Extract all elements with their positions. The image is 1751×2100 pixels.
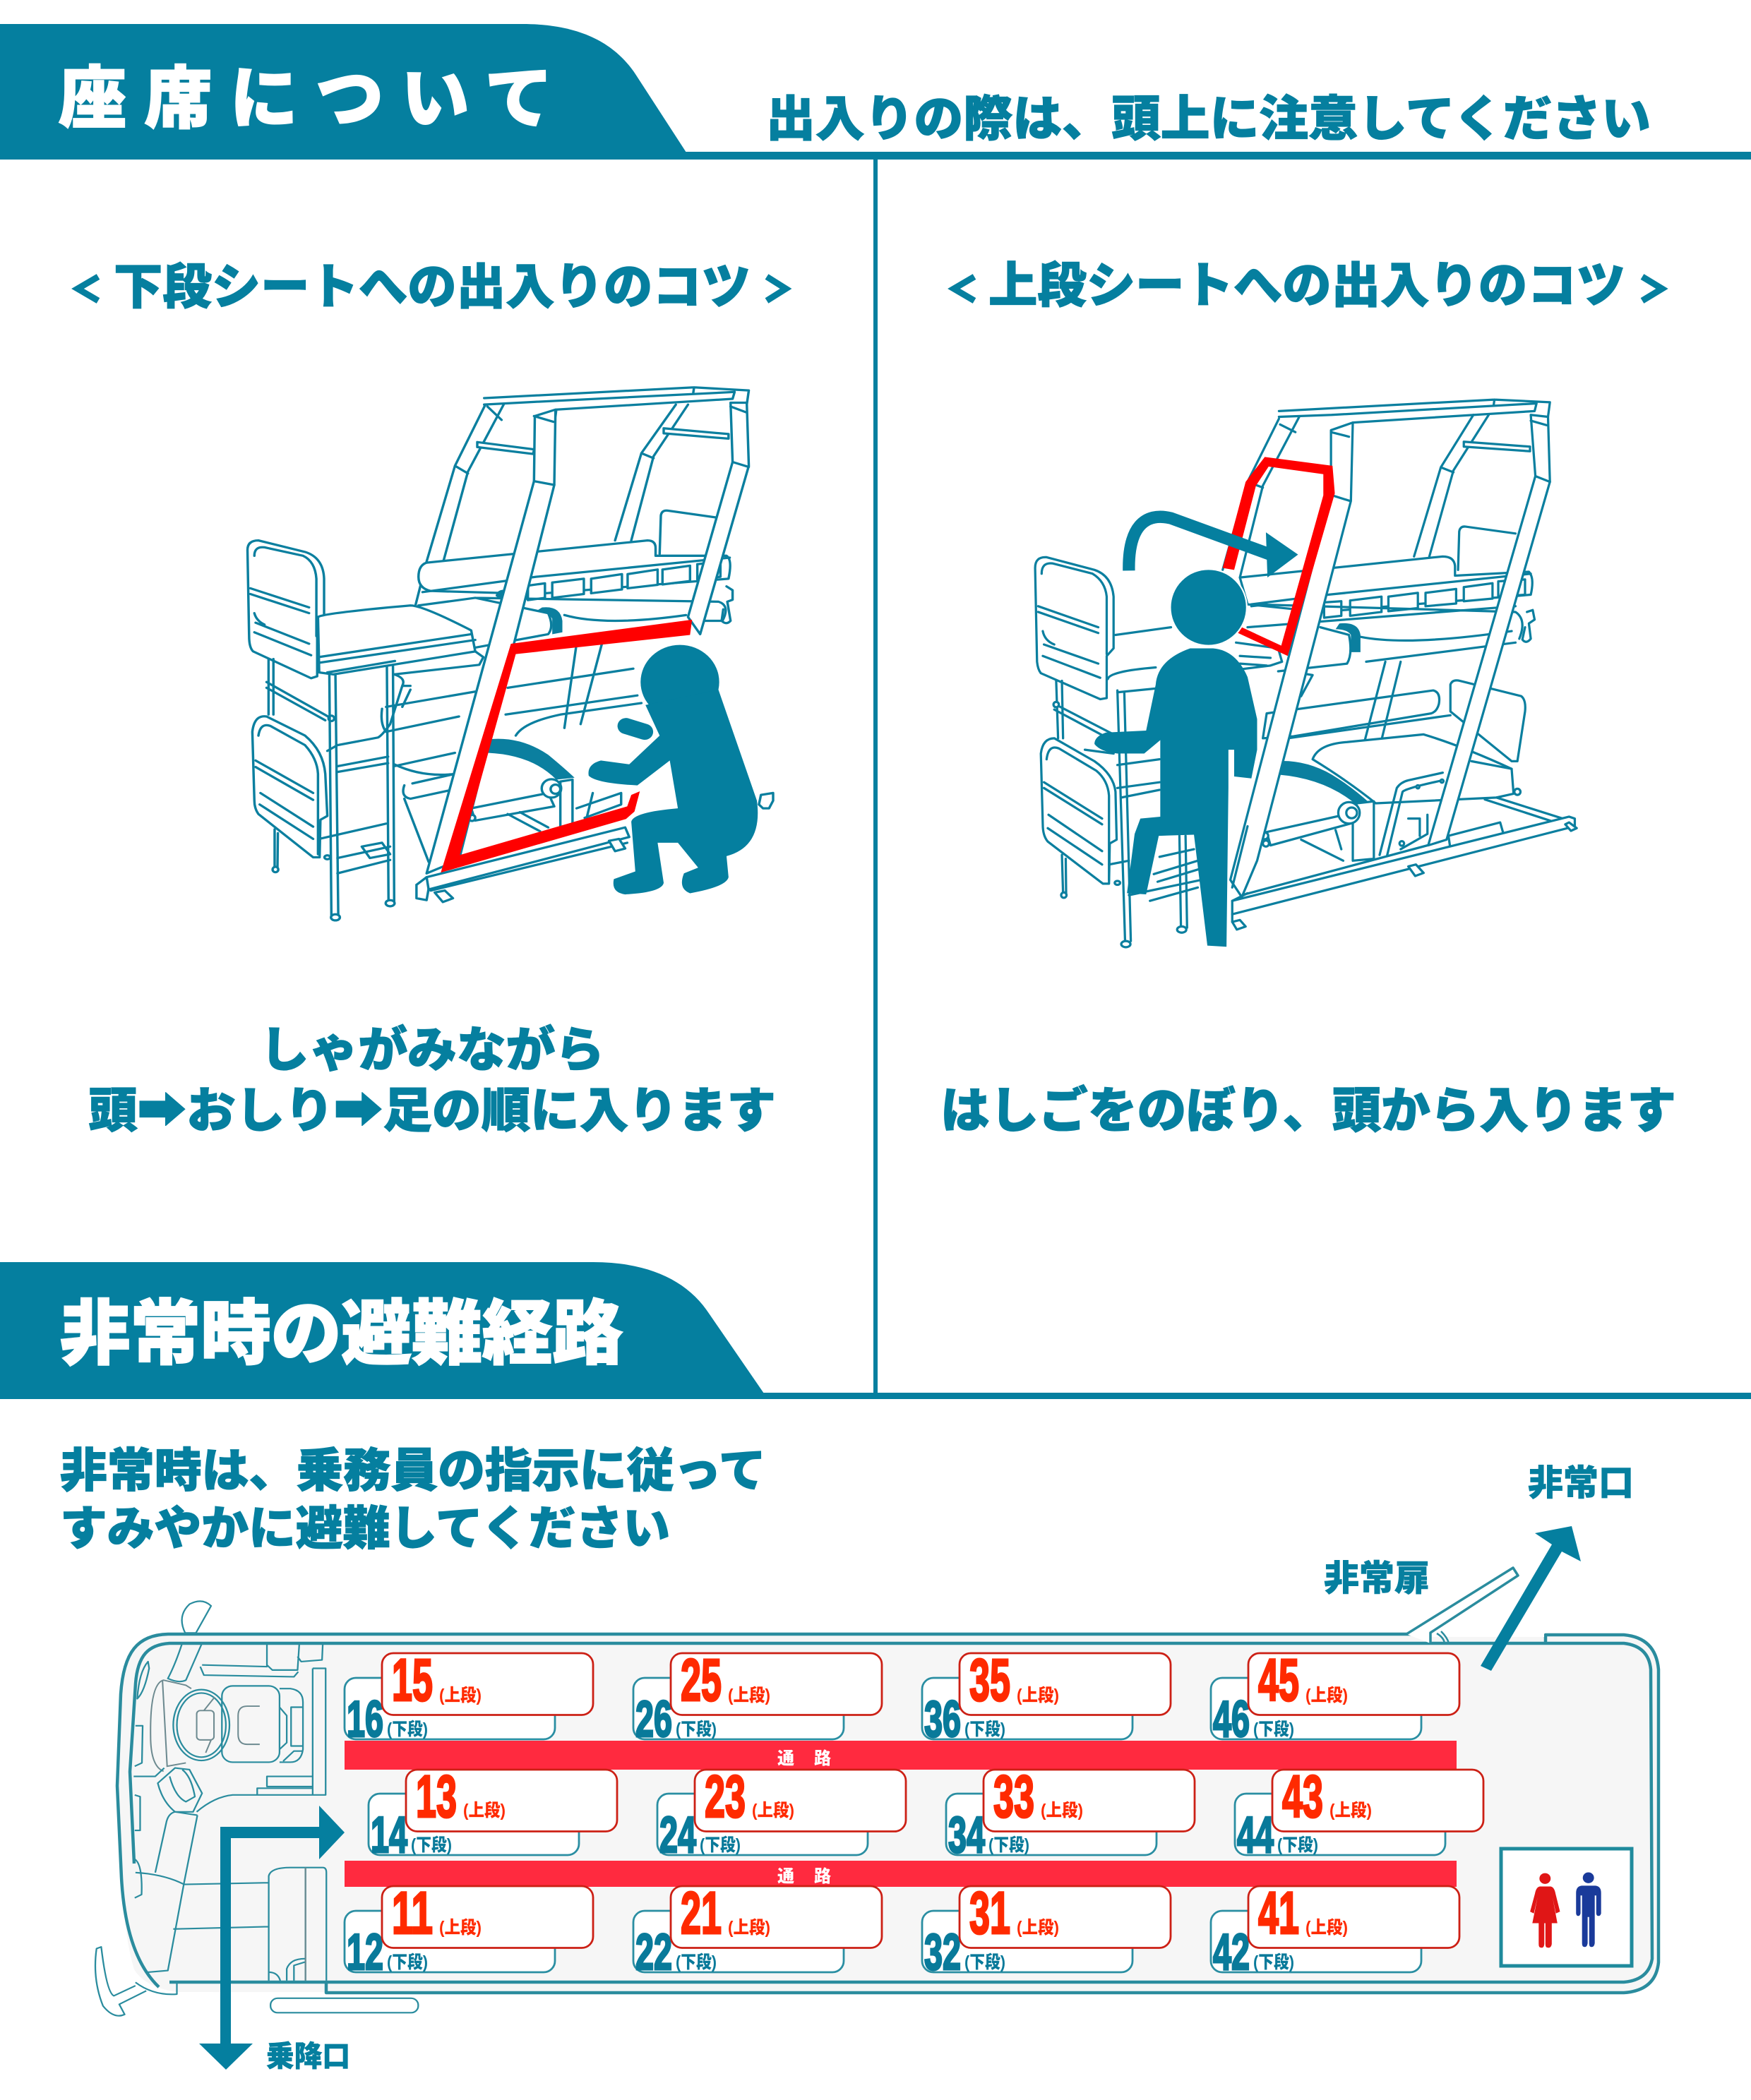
seats 42/41: (上段) [1305, 1918, 1348, 1938]
restroom [1501, 1849, 1632, 1966]
seats 12/11 [345, 1880, 593, 1981]
seats 16/15 [345, 1647, 593, 1748]
seats 14/13: (下段) [411, 1835, 452, 1855]
seats 32/31: 31 [969, 1880, 1010, 1946]
seats 14/13: 14 [371, 1807, 407, 1864]
seats 22/21: (上段) [728, 1918, 770, 1938]
lower left backrest [1041, 738, 1117, 884]
seats 26/25: 26 [635, 1691, 672, 1748]
aisle 1 [345, 1741, 1457, 1770]
seats 16/15: 16 [347, 1691, 383, 1748]
seats 16/15: 15 [392, 1647, 433, 1713]
seats 34/33: 33 [993, 1763, 1034, 1830]
seats 12/11: (上段) [439, 1918, 482, 1938]
seats 46/45: 46 [1213, 1691, 1250, 1748]
driver cab [95, 1601, 418, 2016]
seats 26/25: (下段) [676, 1720, 717, 1739]
instructions line 1: 非常時は、乗務員の指示に従って [60, 1444, 766, 1496]
seats 36/35: 36 [924, 1691, 961, 1748]
standing figure [1094, 569, 1257, 947]
seats 24/23: 24 [659, 1807, 696, 1864]
label: emergency exit: 非常口 [1528, 1463, 1634, 1503]
label: emergency door: 非常扉 [1324, 1559, 1430, 1598]
caption: lower seat line 1: しゃがみながら [260, 1024, 604, 1077]
label: boarding door: 乗降口 [266, 2040, 350, 2072]
seats 46/45: 45 [1258, 1647, 1299, 1713]
caption: lower seat line 2: 頭➡おしり➡足の順に入ります [88, 1084, 776, 1138]
seats 42/41: 42 [1213, 1924, 1250, 1981]
seats 16/15: (上段) [439, 1686, 482, 1705]
seats 44/43 [1235, 1763, 1483, 1864]
seats 12/11: 12 [347, 1924, 383, 1981]
bottom rail [426, 827, 629, 889]
seats 24/23: 23 [705, 1763, 746, 1830]
title: seats: 座席について [59, 61, 553, 137]
seats 34/33: (下段) [988, 1835, 1029, 1855]
seats 44/43: 44 [1237, 1807, 1274, 1864]
seats 36/35: 35 [969, 1647, 1010, 1713]
illustration: lower bunk entry [248, 388, 773, 920]
seats 46/45 [1211, 1647, 1459, 1748]
seats 42/41: 41 [1258, 1880, 1299, 1946]
red entry outline [1223, 457, 1335, 656]
seats 34/33: 34 [948, 1807, 985, 1864]
subtitle: mind your head: 出入りの際は、頭上に注意してください [766, 92, 1651, 146]
seats 44/43: 43 [1282, 1763, 1323, 1830]
curved arrow [1129, 517, 1298, 577]
heading: upper seat tips: 上段シートへの出入りのコツ [988, 258, 1625, 313]
seats 24/23: (上段) [752, 1801, 794, 1820]
seats 26/25 [633, 1647, 882, 1748]
left backrest and seat [1035, 557, 1113, 700]
aisle 2: 通路 [777, 1867, 831, 1886]
seats 32/31 [922, 1880, 1171, 1981]
bus floor plan [95, 1568, 1659, 2016]
floor rail [1232, 817, 1574, 914]
seats 22/21: 21 [681, 1880, 722, 1946]
seats 44/43: (上段) [1329, 1801, 1372, 1820]
seats 14/13 [369, 1763, 617, 1864]
lower backrest interior [1450, 680, 1525, 761]
seats 14/13: (上段) [463, 1801, 506, 1820]
caption: upper seat: はしごをのぼり、頭から入ります [940, 1084, 1676, 1138]
title: emergency route: 非常時の避難経路 [60, 1295, 623, 1374]
seats 22/21 [633, 1880, 882, 1981]
seats 36/35: (下段) [964, 1720, 1005, 1739]
seats 22/21: (下段) [676, 1952, 717, 1972]
seats 34/33 [946, 1763, 1195, 1864]
icon: man [1576, 1873, 1601, 1947]
bunk frame [248, 388, 773, 920]
seats 24/23 [657, 1763, 906, 1864]
red entry outline [441, 620, 692, 872]
bus body [117, 1568, 1659, 1993]
seats 46/45: (下段) [1253, 1720, 1294, 1739]
seats 42/41 [1211, 1880, 1459, 1981]
seats 36/35 [922, 1647, 1171, 1748]
seats 12/11: 11 [392, 1880, 433, 1946]
header tab: emergency route [0, 1262, 764, 1393]
left backrests and seat [248, 541, 324, 678]
instructions line 2: すみやかに避難してください [60, 1502, 670, 1554]
arrow: emergency exit [1481, 1526, 1581, 1671]
seats 46/45: (上段) [1305, 1686, 1348, 1705]
seats 26/25: (上段) [728, 1686, 770, 1705]
seats 32/31: 32 [924, 1924, 961, 1981]
seats 24/23: (下段) [700, 1835, 741, 1855]
lower left backrest and seat [252, 716, 328, 857]
emergency door [1406, 1568, 1518, 1643]
header tab: seats [0, 24, 686, 152]
seats 22/21: 22 [635, 1924, 672, 1981]
illustration: upper bunk entry [1035, 400, 1577, 947]
ladder front posts [426, 409, 556, 873]
seats 34/33: (上段) [1041, 1801, 1083, 1820]
bunk frame [1035, 400, 1577, 947]
aisle 1: 通路 [777, 1749, 831, 1768]
seats 26/25: 25 [681, 1647, 722, 1713]
seats 14/13: 13 [416, 1763, 457, 1830]
seats 16/15: (下段) [387, 1720, 428, 1739]
arrow: to boarding door and aisle [199, 1806, 345, 2070]
seats 12/11: (下段) [387, 1952, 428, 1972]
heading: lower seat tips: 下段シートへの出入りのコツ [114, 260, 751, 314]
ladder posts [1231, 423, 1353, 897]
aisle 2 [345, 1861, 1457, 1887]
seats 36/35: (上段) [1017, 1686, 1059, 1705]
icon: woman [1530, 1873, 1560, 1948]
seats 32/31: (上段) [1017, 1918, 1059, 1938]
seats 44/43: (下段) [1277, 1835, 1318, 1855]
crouching figure [588, 645, 758, 894]
seats 32/31: (下段) [964, 1952, 1005, 1972]
bunk interior behind red [506, 640, 641, 736]
seats 42/41: (下段) [1253, 1952, 1294, 1972]
